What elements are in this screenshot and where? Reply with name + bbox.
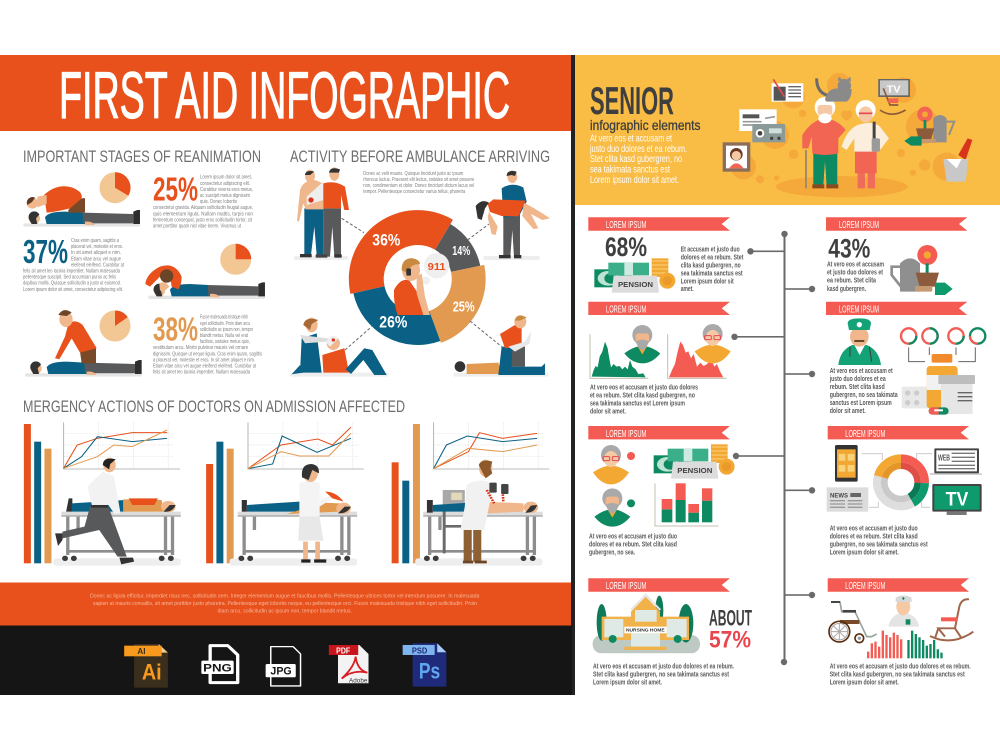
avatar man with dot <box>594 488 635 527</box>
icon: TV: TV <box>946 489 968 510</box>
text: Lorem ipsum dolor sit amet. <box>830 677 899 686</box>
footer text: sapien at mauris convallis, sit amet porttitor justo pharetra. Pellentesque eget lobortis neque, eu pellentesque orci. Fusce malesuada tristique nibh eget sollicitudin. Proin <box>93 601 477 607</box>
senior header panel <box>575 55 1000 205</box>
text: At vero eos et accusam et justo duo dolores et ea rebum. <box>593 661 734 670</box>
icon: PSD file: Ps <box>419 659 440 683</box>
text block 38%: eget sollicitudin. Proin diam arcu <box>200 321 250 327</box>
icon: PDF file <box>329 645 369 684</box>
icon: PSD file: PSD <box>412 646 427 655</box>
text block 38% <box>153 315 262 376</box>
text block 37%: In sit amet aliquet e nim. <box>71 250 121 256</box>
center divider <box>571 55 575 695</box>
panel: reanimation stages <box>23 171 265 377</box>
icon: nurse <box>888 595 919 627</box>
text block 37%: placerat vel, molestie et eros. <box>71 244 123 250</box>
line chart 3 <box>434 422 549 469</box>
text block 38%: dignissim. Quisque ut neque ligula. Cras enim quam, sagittis <box>153 351 262 357</box>
illustration: chest check stage <box>23 186 140 227</box>
text block 25%: quis elementum ligula. Nullam mattis, turpis non <box>153 211 253 217</box>
text block 38%: Fusce malesuada tristique nibh <box>200 315 248 321</box>
ribbon: LOREM IPSUM <box>839 220 879 231</box>
decorative blobs <box>731 73 961 197</box>
ribbon: LOREM IPSUM <box>845 429 885 440</box>
bar chart green <box>907 631 943 658</box>
text: rebum. Stet clita kasd <box>830 382 885 391</box>
stat 25%: 25% <box>153 171 198 208</box>
text: dolor sit amet. <box>830 406 866 415</box>
illustration: bandaged man supported <box>294 167 502 350</box>
intro text: At vero eos et accusam et <box>590 133 672 145</box>
label 36%: 36% <box>372 231 400 250</box>
text <box>589 531 677 556</box>
text <box>830 523 928 556</box>
text <box>681 244 744 293</box>
text: Lorem ipsum dolor sit <box>681 276 734 285</box>
label 14%: 14% <box>452 243 471 258</box>
icon: man calling 911 <box>394 253 449 315</box>
text block 37%: felis sit amet leo lacinia imperdiet. Nullam malesuada <box>23 268 120 274</box>
stat 68%: 68% <box>605 232 647 262</box>
text block intro: rhoncus luctus. Praesent elit lectus, sodales sit amet posuere <box>363 177 474 183</box>
ribbon: LOREM IPSUM <box>839 304 879 315</box>
text <box>830 661 971 686</box>
icon: medicine <box>902 354 975 415</box>
text block 37%: Cras enim quam, sagittis a <box>71 238 119 244</box>
icon: crossword <box>772 79 803 102</box>
icon: PSD file <box>403 643 446 687</box>
icon: AI file <box>124 644 168 688</box>
stat 43%: 43% <box>828 234 870 264</box>
footer band <box>0 582 571 626</box>
icon: newspaper: NEWS <box>830 492 848 499</box>
panel: nursing home <box>588 578 752 686</box>
text: At vero eos et accusam <box>827 260 884 269</box>
line chart 2 <box>248 422 364 469</box>
illustration: patient and nurse <box>230 464 357 566</box>
ribbon <box>588 578 730 592</box>
illustration: nursing home <box>593 595 700 653</box>
text block 37%: dapibus mollis. Quisque sollicitudin a justo ut euismod. <box>23 281 121 287</box>
illustration: patient and doctor with defibrillator <box>415 460 543 566</box>
intro text <box>589 133 687 186</box>
ribbon <box>828 426 969 440</box>
text: Stet clita kasd gubergren, no sea takimata sanctus est <box>593 669 729 678</box>
text block 25% <box>153 175 253 230</box>
panel: pension comparison <box>588 426 735 556</box>
icon: web laptop: WEB <box>938 454 950 463</box>
text block 38%: facilisis, sodales metus quis, <box>200 339 250 345</box>
illustration: leg elevation <box>453 315 548 377</box>
text block 38%: sollicitudin ac ipsum non, tempor <box>200 327 253 333</box>
illustration: woman treating head wound <box>290 318 388 377</box>
text block 37% <box>23 238 124 293</box>
intro text: sea takimata sanctus est <box>590 164 670 176</box>
panel: activity before ambulance <box>290 167 550 377</box>
format icon band <box>0 626 572 695</box>
text: sanctus est Lorem ipsum <box>830 398 892 407</box>
text: ea rebum. Stet clita <box>827 276 877 285</box>
footer text: diam arcu, sollicitudin ac ipsum non, tempor blandit metus. <box>218 608 352 614</box>
icon: newspaper <box>739 109 777 131</box>
text block 25%: quis. Donec lobortis <box>200 199 237 205</box>
icon: web laptop <box>930 448 982 475</box>
illustration: chest compression stage <box>25 310 142 377</box>
avatar senior man <box>624 325 660 363</box>
text: dolores et ea rebum. Stet clita kasd <box>830 531 918 540</box>
panel: gardening 43% <box>826 217 967 295</box>
ribbon <box>588 426 730 440</box>
illustration: old man <box>802 97 846 188</box>
text: clita kasd gubergren, no <box>681 260 741 269</box>
ribbon: LOREM IPSUM <box>606 220 646 231</box>
panel: demographic charts <box>588 302 731 415</box>
text: dolor sit amet. <box>590 406 626 415</box>
avatar woman with dot <box>593 445 635 484</box>
panel: care equipment <box>828 578 973 686</box>
bar chart 3 <box>392 424 420 563</box>
icon: pension money <box>594 258 675 293</box>
text block 25%: ac suscipit metus dignissim <box>200 193 250 199</box>
text: sea takimata sanctus est <box>681 268 743 277</box>
illustration: man carrying woman <box>476 170 550 260</box>
avatar senior woman <box>695 324 731 363</box>
text block 38%: a placerat vel, molestie et eros. In sit amet aliquet e nim. <box>153 357 255 363</box>
label 25%: 25% <box>453 299 475 316</box>
icon: tablet <box>835 445 858 482</box>
text block intro <box>363 171 474 195</box>
text: gubergren, no sea takimata sanctus est <box>830 539 928 548</box>
icon: AI file: AI <box>137 646 145 656</box>
text block 25%: Curabitur viverra eros metus, <box>200 187 253 193</box>
text: At vero eos et accusam et <box>830 366 893 375</box>
text: Lorem ipsum dolor sit amet. <box>830 547 899 556</box>
text: gubergren, no sea. <box>589 547 635 556</box>
text: amet. <box>681 284 694 293</box>
heading: senior: SENIOR <box>590 80 674 123</box>
area chart green <box>590 334 648 378</box>
icon: TV and rocking chair <box>878 79 910 114</box>
text block 38%: vestibulum arcu. Morbi pulvinar mauris vel ornare <box>153 345 248 351</box>
stat about: ABOUT <box>709 606 752 631</box>
icon: cat <box>817 77 852 102</box>
text: et ea rebum. Stet clita kasd gubergren, no <box>590 390 695 399</box>
text block 25%: Lorem ipsum dolor sit amet, <box>200 175 252 181</box>
panel: media donut <box>827 426 982 556</box>
icon: man calling 911: 911 <box>428 262 446 273</box>
intro text: Lorem ipsum dolor sit amet. <box>590 174 679 186</box>
text block 25%: consectetur adipiscing elit. <box>200 181 250 187</box>
icon: TV and rocking chair: TV <box>887 84 901 95</box>
heading: doctors actions: MERGENCY ACTIONS OF DOCTORS ON ADMISSION AFFECTED <box>23 397 405 416</box>
text block 38%: blandit metus. Nulla vel erat <box>200 333 248 339</box>
stat 57%: 57% <box>709 627 751 654</box>
stat 37%: 37% <box>23 233 68 270</box>
text: justo duo dolores et ea <box>829 374 886 383</box>
bar chart red <box>867 631 902 658</box>
ribbon: LOREM IPSUM <box>606 581 646 592</box>
text: gubergren, no sea takimata <box>830 390 898 399</box>
text: dolores et ea rebum. Stet <box>681 252 744 261</box>
illustration: rescue breathing stage <box>145 265 265 299</box>
text: At vero eos et accusam et justo duo dolores <box>590 382 698 392</box>
footer text <box>90 594 479 614</box>
text <box>593 661 734 686</box>
text block 25%: consectetur gravida. Aliquam sollicitudin feugiat augue, <box>153 205 253 211</box>
icon: doctor <box>838 318 881 365</box>
ribbon: LOREM IPSUM <box>606 429 646 440</box>
line chart 1 <box>64 422 180 469</box>
intro text: Stet clita kasd gubergren, no <box>590 153 682 165</box>
text: sea takimata sanctus est Lorem ipsum <box>590 398 685 407</box>
subheading: infographic elements <box>590 117 700 133</box>
pie chart 38% <box>100 310 130 342</box>
text block 37%: eleifend eleifend. Curabitur at <box>71 262 124 268</box>
panel: pension 68% <box>588 217 744 293</box>
text: et justo duo dolores et <box>827 268 883 277</box>
ribbon <box>826 217 967 231</box>
icon: newspaper <box>827 487 868 512</box>
title banner <box>0 55 571 132</box>
connector lines <box>862 454 932 507</box>
ribbon <box>588 302 730 315</box>
icon: wine bucket <box>943 138 972 182</box>
icon: watering can and flower <box>892 245 953 295</box>
text block 38%: Etiam vitae arcu vel augue eleifend eleifend. Curabitur at <box>153 364 256 370</box>
text block 25%: fermentum consequat, justo eros sollicitudin tortor, sit <box>153 217 253 223</box>
footer text: Donec ac ligula efficitur, imperdiet risus nec, sollicitudin sem. Integer elementum augue et faucibus mollis. Pellentesque ultrices tortor vel interdum posuere. In malesuada <box>90 594 479 600</box>
label 26%: 26% <box>379 312 407 331</box>
area chart red <box>668 334 727 378</box>
text: kasd gubergren. <box>827 284 866 293</box>
icon: AI file: Ai <box>142 659 162 684</box>
text: Et accusam et justo duo <box>681 244 740 253</box>
ribbon <box>588 217 730 231</box>
text: Lorem ipsum dolor sit amet. <box>593 677 662 686</box>
text block 37%: Etiam vitae arcu vel augue <box>71 256 121 262</box>
icon: PDF file: PDF <box>336 646 350 655</box>
icon: pension money <box>654 444 735 479</box>
text block 37%: Lorem ipsum dolor sit amet, consectetur adipiscing elit. <box>23 287 123 293</box>
icon: PNG file: PNG <box>203 661 232 674</box>
heading: reanimation: IMPORTANT STAGES OF REANIMATION <box>23 147 261 166</box>
icon: JPG file <box>266 647 301 686</box>
stat 38%: 38% <box>153 311 198 348</box>
illustration: old woman <box>842 100 889 188</box>
illustration: nursing home: NURSING HOME <box>626 628 665 633</box>
text: dolores et ea rebum. Stet clita kasd <box>589 539 677 548</box>
text block intro: Donec ac velit mauris. Quisque tincidunt justo ac ipsum <box>363 171 463 177</box>
icon: rocking chair <box>930 599 973 640</box>
text: At vero eos et accusam et justo duo <box>589 531 677 540</box>
text block intro: non, condimentum et dolor. Donec tincidunt dictum lacus vel <box>363 183 474 189</box>
stacked bar chart <box>655 483 718 526</box>
panel: nurse and medicine <box>826 302 985 415</box>
intro text: justo duo dolores et ea rebum. <box>589 143 687 155</box>
icon: JPG file: JPG <box>270 666 292 677</box>
icon: PNG file <box>201 646 238 683</box>
text: At vero eos et accusam et justo duo <box>830 523 918 532</box>
icon: flower and watering can <box>904 107 954 146</box>
text <box>829 366 898 415</box>
text <box>590 382 698 415</box>
icon: wheelchair <box>829 601 877 643</box>
icon: portrait frame <box>723 142 750 172</box>
icon: radio <box>752 124 785 142</box>
text <box>827 260 884 293</box>
bar chart 2 <box>206 442 234 563</box>
text block 25%: amet porttitor quam nisl vitae lorem. Vivamus ut <box>153 224 242 230</box>
pie chart 37% <box>220 244 251 275</box>
donut chart <box>868 450 934 515</box>
ribbon: LOREM IPSUM <box>606 304 646 315</box>
timeline <box>731 231 815 665</box>
panel: doctors actions <box>24 422 549 566</box>
ribbon <box>826 302 967 315</box>
icon: TV <box>932 484 982 515</box>
bar chart 1 <box>24 424 51 563</box>
heading: ambulance: ACTIVITY BEFORE AMBULANCE ARRIVING <box>290 147 550 166</box>
text block 37%: pellentesque suscipit. Sed accumsan purus ac felis <box>23 275 116 281</box>
title banner: FIRST AID INFOGRAPHIC <box>59 58 510 132</box>
ribbon: LOREM IPSUM <box>845 581 885 592</box>
icon: PDF file: Adobe <box>349 678 367 684</box>
ribbon <box>828 578 969 592</box>
pie chart 25% <box>100 172 131 203</box>
icon: ring indicators <box>901 328 985 362</box>
donut chart <box>349 210 486 345</box>
text block intro: tempor. Pellentesque consectetur varius tellus, pharetra <box>363 189 465 195</box>
text block 38%: felis sit amet leo lacinia imperdiet. Nullam malesuada <box>153 370 250 376</box>
illustration: patient and running doctor <box>53 458 181 566</box>
